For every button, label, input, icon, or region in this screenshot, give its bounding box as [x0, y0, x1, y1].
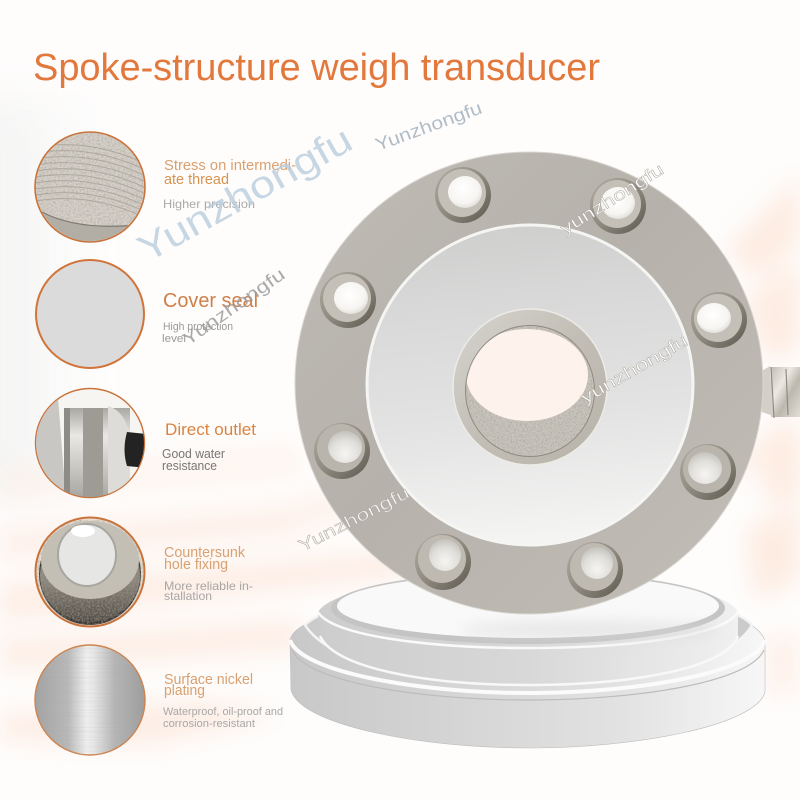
feature 5 text: Surface nickel	[164, 672, 253, 688]
hole 2	[590, 178, 646, 234]
watermarks	[131, 98, 691, 556]
cable connector on the right	[760, 366, 800, 418]
feature 2: cover seal photo	[36, 260, 144, 368]
feature 2 text: Cover seal	[163, 290, 258, 312]
feature 1 text	[163, 158, 296, 211]
hole 3	[320, 272, 376, 328]
feature 2 text: High protection	[163, 321, 233, 333]
watermark centre right: yunzhongfu	[578, 331, 691, 407]
feature 3 text	[162, 421, 256, 473]
feature 3: outlet photo	[36, 385, 146, 500]
hole 6	[680, 444, 736, 500]
feature 5 text	[163, 672, 283, 730]
disc inner face	[367, 225, 693, 545]
watermark top centre: Yunzhongfu	[373, 98, 485, 155]
feature 3 text: Direct outlet	[165, 421, 256, 439]
mounting holes	[314, 167, 747, 598]
watermark lower left: Yunzhongfu	[295, 483, 413, 556]
feature 5 text: corrosion-resistant	[163, 718, 255, 730]
feature 5: nickel plating photo	[35, 645, 145, 755]
base inner plate	[331, 572, 725, 644]
hole 7	[415, 534, 471, 590]
centre collar	[453, 309, 607, 465]
feature 4 text: Countersunk	[164, 545, 246, 561]
outer groove	[305, 590, 752, 683]
large blue watermark: Yunzhongfu	[131, 119, 360, 271]
centre bore	[465, 325, 595, 457]
feature 2 text	[162, 290, 258, 345]
title: Spoke-structure weigh transducer	[33, 47, 600, 89]
hole 1	[435, 167, 491, 223]
feature 4 text	[164, 545, 253, 603]
feature 1 text: ate thread	[164, 172, 229, 188]
feature 3 text: resistance	[162, 459, 217, 473]
feature 4 text: stallation	[164, 589, 212, 603]
feature 1 text: Higher precision	[163, 197, 255, 211]
base plate under the transducer	[290, 572, 765, 748]
hole 8	[567, 542, 623, 598]
hole 5	[314, 423, 370, 479]
feature 1: thread photo	[30, 132, 150, 245]
base middle step	[318, 575, 738, 684]
hole 4	[691, 292, 747, 348]
load cell disc	[295, 152, 763, 614]
feature 1 text: Stress on intermedi-	[164, 158, 296, 174]
feature 5 text: Waterproof, oil-proof and	[163, 706, 283, 718]
feature 2 text: level	[162, 333, 186, 345]
feature 5 text: plating	[164, 683, 205, 699]
base outer ring	[290, 592, 765, 748]
watermark over cover seal: Yunzhongfu	[179, 264, 289, 349]
feature 4 text: More reliable in-	[164, 579, 253, 593]
watermark top right: yunzhongfu	[557, 160, 667, 238]
feature 4: countersunk hole photo	[35, 518, 145, 626]
feature 4 text: hole fixing	[164, 557, 228, 573]
feature 3 text: Good water	[162, 447, 225, 461]
